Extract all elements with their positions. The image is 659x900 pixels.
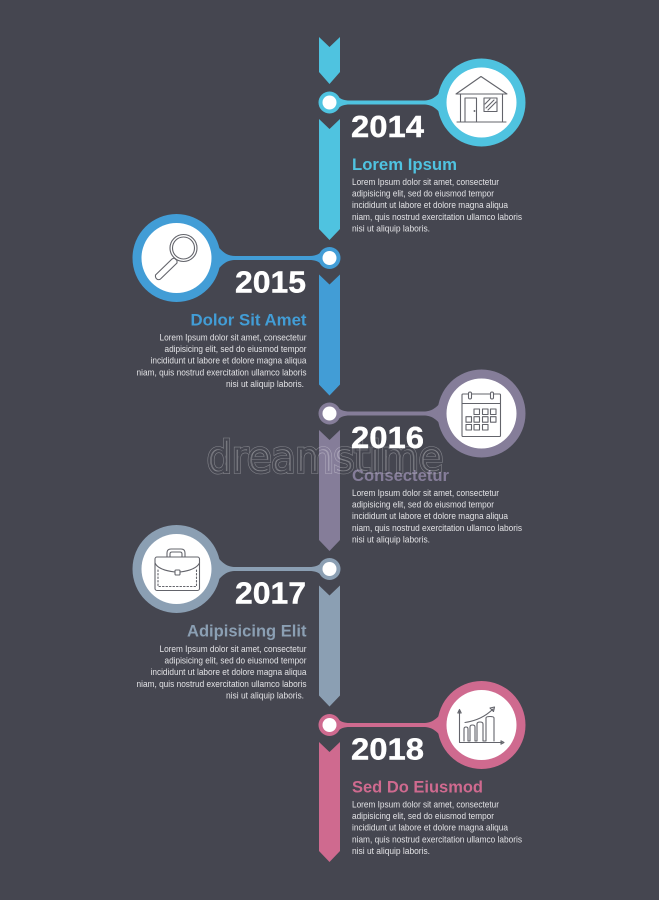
heading: Lorem Ipsum: Lorem Ipsum <box>352 155 457 174</box>
text block 2016: adipisicing elit, sed do eiusmod tempor <box>352 499 494 510</box>
text block 2014 <box>352 176 522 233</box>
icon: magnifier <box>155 234 197 280</box>
text block 2016: incididunt ut labore et dolore magna aliqua <box>352 510 509 521</box>
arrow 2018 <box>319 742 340 862</box>
text block 2015: adipisicing elit, sed do eiusmod tempor <box>164 343 306 354</box>
text block 2018 <box>352 798 522 856</box>
heading: Sed Do Eiusmod: Sed Do Eiusmod <box>352 778 483 796</box>
icon: calendar <box>462 392 500 436</box>
heading: Adipisicing Elit: Adipisicing Elit <box>187 622 307 640</box>
text block 2018: adipisicing elit, sed do eiusmod tempor <box>352 810 494 821</box>
year 2014: 2014 <box>351 109 425 144</box>
connector and node 2015 <box>132 214 340 302</box>
icon: growth chart <box>458 707 504 744</box>
connector and node 2017 <box>132 525 340 613</box>
year 2015: 2015 <box>235 264 306 300</box>
text block 2017 <box>136 643 307 700</box>
text block 2018: Lorem Ipsum dolor sit amet, consectetur <box>352 798 499 810</box>
text block 2015: nisi ut aliquip laboris. <box>226 378 304 389</box>
arrow 2014 <box>319 119 340 240</box>
arrow 2016 <box>319 430 340 551</box>
text block 2016 <box>352 487 522 544</box>
text block 2014: incididunt ut labore et dolore magna aliqua <box>352 199 509 210</box>
text block 2017: incididunt ut labore et dolore magna aliqua <box>150 666 307 677</box>
text block 2017: Lorem Ipsum dolor sit amet, consectetur <box>160 643 306 654</box>
panel: 2014 <box>318 58 526 240</box>
panel: 2015 <box>132 214 340 396</box>
text block 2015 <box>136 332 307 389</box>
text block 2015: niam, quis nostrud exercitation ullamco laboris <box>136 366 307 377</box>
text block 2018: incididunt ut labore et dolore magna aliqua <box>352 822 509 833</box>
text block 2018: nisi ut aliquip laboris. <box>352 845 430 856</box>
year 2016: 2016 <box>351 420 424 455</box>
year 2018: 2018 <box>351 732 424 766</box>
text block 2017: niam, quis nostrud exercitation ullamco laboris <box>136 678 307 689</box>
text block 2016: nisi ut aliquip laboris. <box>352 533 430 544</box>
text block 2016: Lorem Ipsum dolor sit amet, consectetur <box>352 487 499 498</box>
year 2017: 2017 <box>235 576 306 610</box>
text block 2014: Lorem Ipsum dolor sit amet, consectetur <box>352 176 499 187</box>
top arrow segment <box>319 37 340 84</box>
connector and node 2016 <box>318 370 526 458</box>
text block 2014: adipisicing elit, sed do eiusmod tempor <box>352 188 494 199</box>
panel: 2018 <box>318 681 526 862</box>
icon: briefcase <box>155 549 200 590</box>
arrow 2015 <box>319 274 340 396</box>
connector and node 2014 <box>318 58 526 146</box>
text block 2014: nisi ut aliquip laboris. <box>352 222 430 233</box>
heading: Dolor Sit Amet: Dolor Sit Amet <box>190 310 307 330</box>
text block 2014: niam, quis nostrud exercitation ullamco laboris <box>352 211 522 222</box>
panel: 2016 <box>318 370 526 551</box>
icon: house <box>456 76 507 122</box>
panel: 2017 <box>132 525 340 706</box>
text block 2017: nisi ut aliquip laboris. <box>226 689 304 700</box>
text block 2017: adipisicing elit, sed do eiusmod tempor <box>164 655 306 666</box>
heading: Consectetur: Consectetur <box>352 466 449 485</box>
text block 2015: Lorem Ipsum dolor sit amet, consectetur <box>160 332 306 342</box>
watermark <box>208 438 443 474</box>
arrow 2017 <box>319 586 340 706</box>
text block 2015: incididunt ut labore et dolore magna aliqua <box>150 355 307 366</box>
text block 2016: niam, quis nostrud exercitation ullamco laboris <box>352 522 522 533</box>
connector and node 2018 <box>318 681 526 769</box>
text block 2018: niam, quis nostrud exercitation ullamco laboris <box>352 833 522 844</box>
